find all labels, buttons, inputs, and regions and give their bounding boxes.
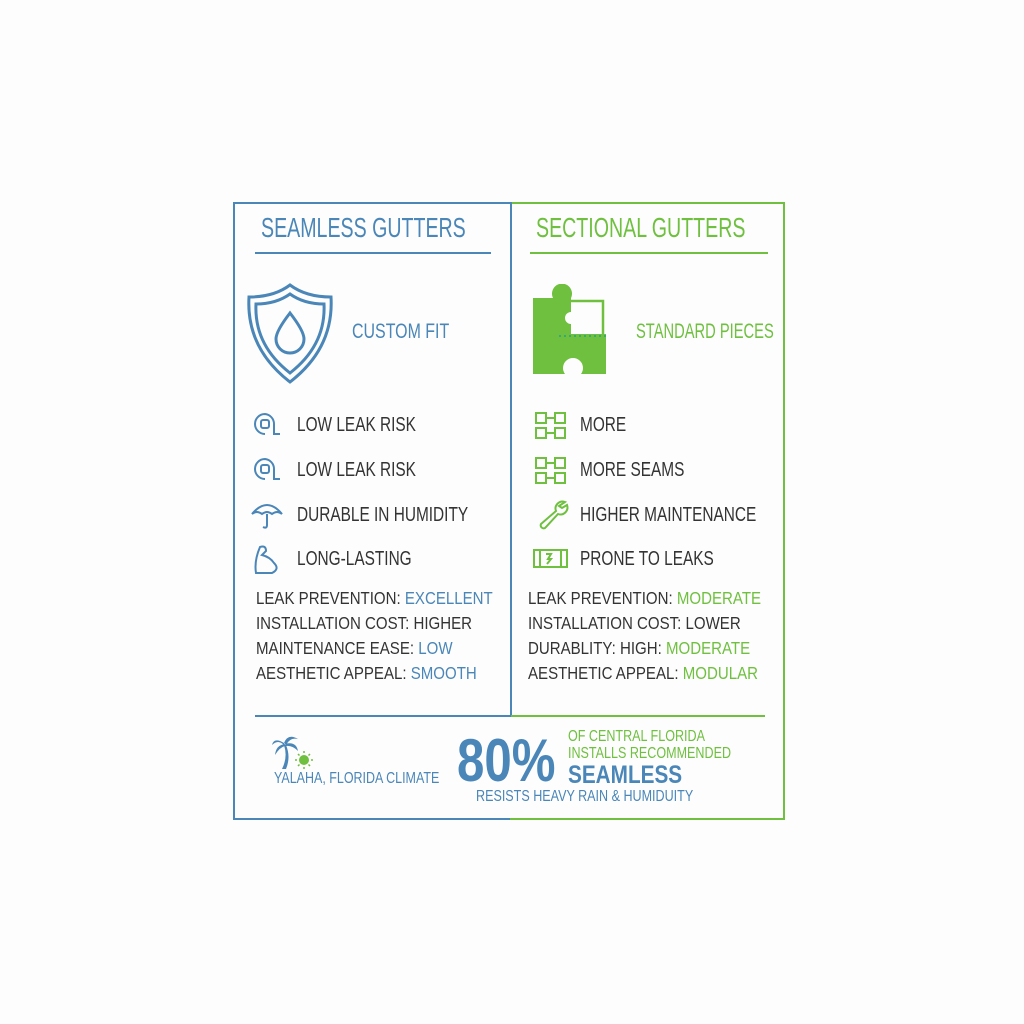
text: standard pieces: STANDARD PIECES <box>636 320 774 343</box>
heading: sectional: SECTIONAL GUTTERS <box>536 212 745 243</box>
callout: recommendation: SEAMLESS <box>568 761 682 789</box>
panel: comparison frame <box>233 202 785 820</box>
list: seamless features: LONG-LASTING <box>297 548 412 570</box>
icon: puzzle <box>533 284 606 374</box>
stats: seamless: INSTALLATION COST: HIGHER <box>256 613 472 633</box>
callout: recommendation: OF CENTRAL FLORIDA <box>568 728 705 745</box>
stats: sectional: DURABLITY: HIGH: MODERATE <box>528 638 750 658</box>
heading: seamless: SEAMLESS GUTTERS <box>261 212 466 243</box>
stat: 80%: 80% <box>457 727 555 794</box>
list: sectional features <box>533 412 756 570</box>
list: sectional features: HIGHER MAINTENANCE <box>580 504 756 526</box>
list: sectional features: MORE <box>580 414 626 436</box>
text: custom fit: CUSTOM FIT <box>352 320 449 343</box>
stats: sectional: LEAK PREVENTION: MODERATE <box>528 588 761 608</box>
stats: sectional: INSTALLATION COST: LOWER <box>528 613 741 633</box>
icon: palm and sun <box>272 736 313 769</box>
stats: sectional: AESTHETIC APPEAL: MODULAR <box>528 663 758 683</box>
callout: recommendation: INSTALLS RECOMMENDED <box>568 745 731 762</box>
list: seamless features: LOW LEAK RISK <box>297 414 416 436</box>
stats: seamless: LEAK PREVENTION: EXCELLENT <box>256 588 493 608</box>
stats: seamless: AESTHETIC APPEAL: SMOOTH <box>256 663 477 683</box>
callout: recommendation <box>568 728 731 789</box>
list: seamless features <box>251 413 468 574</box>
list: seamless features: LOW LEAK RISK <box>297 459 416 481</box>
stats: seamless <box>256 588 493 683</box>
text: resists: RESISTS HEAVY RAIN & HUMIDUITY <box>476 788 693 805</box>
icon: shield with drop <box>247 283 333 384</box>
list: sectional features: PRONE TO LEAKS <box>580 548 714 570</box>
stats: sectional <box>528 588 761 683</box>
list: sectional features: MORE SEAMS <box>580 459 684 481</box>
stats: seamless: MAINTENANCE EASE: LOW <box>256 638 453 658</box>
list: seamless features: DURABLE IN HUMIDITY <box>297 504 468 526</box>
text: location: YALAHA, FLORIDA CLIMATE <box>274 770 439 787</box>
